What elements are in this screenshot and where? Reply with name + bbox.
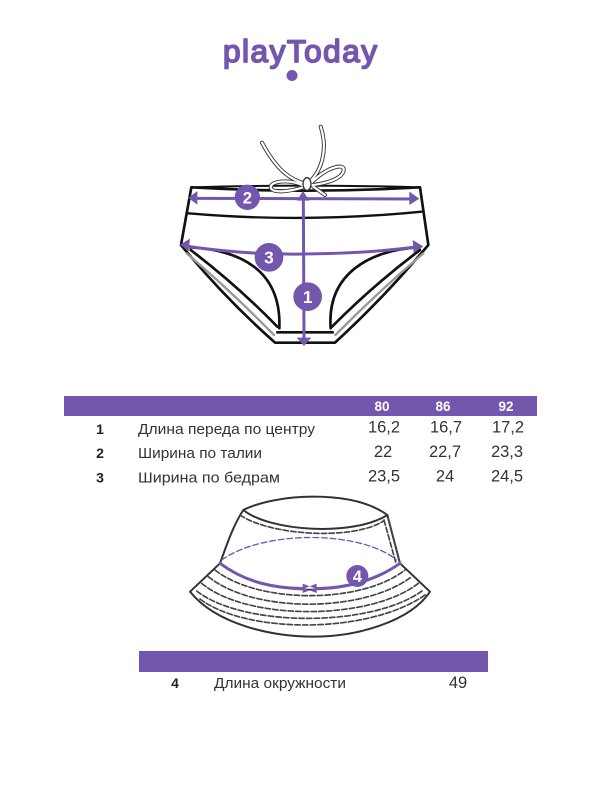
- arrow 1: front length: 1: [303, 287, 313, 307]
- arrow 3: hip width: [180, 239, 423, 272]
- arrow 3: hip width: 3: [264, 248, 274, 268]
- measurement arrows on briefs: [180, 185, 423, 346]
- row 1: [96, 418, 524, 438]
- header sizes: 80: [374, 399, 390, 414]
- row 3: [96, 468, 523, 486]
- briefs outline: [181, 187, 428, 343]
- hat stitching: [197, 515, 426, 625]
- arrow 2: waist width: [188, 185, 419, 210]
- row 3: Ширина по бедрам: [138, 470, 280, 486]
- arrow 4: circumference: [220, 563, 400, 593]
- arrow 1: front length: [293, 191, 322, 346]
- logo: playToday: playToday: [223, 33, 377, 69]
- row 4: Длина окружности: [214, 675, 346, 692]
- row 1: 1: [96, 421, 104, 437]
- row 1: Длина переда по центру: [138, 421, 316, 438]
- row 4: [171, 674, 467, 692]
- row 1: 17,2: [492, 418, 524, 436]
- hat outline: [190, 497, 430, 637]
- drawstring: [262, 127, 344, 195]
- header sizes: 86: [435, 399, 451, 414]
- row 3: 24,5: [491, 468, 523, 486]
- row 2: 22: [374, 443, 392, 461]
- arrow 4: circumference: 4: [353, 567, 363, 586]
- row 1: 16,7: [430, 418, 462, 436]
- garment: swim briefs with drawstring: [181, 186, 428, 343]
- dashed back circumference: [222, 537, 397, 560]
- row 4: 49: [449, 674, 467, 692]
- table header bar: [64, 396, 537, 416]
- header sizes: 92: [498, 399, 514, 414]
- row 2: 22,7: [429, 443, 461, 461]
- row 2: Ширина по талии: [138, 445, 262, 462]
- row 3: 24: [436, 468, 454, 486]
- header sizes: [374, 399, 514, 414]
- garment: bucket hat: [190, 497, 430, 637]
- row 1: 16,2: [368, 418, 400, 436]
- row 2: 23,3: [491, 443, 523, 461]
- row 4: 4: [171, 675, 179, 691]
- row 2: [96, 443, 523, 462]
- table header bar: [139, 651, 488, 672]
- row 2: 2: [96, 445, 104, 461]
- size table 2: [139, 651, 488, 692]
- arrow 2: waist width: 2: [243, 188, 252, 207]
- row 3: 3: [96, 470, 104, 486]
- size table 1: [64, 396, 537, 486]
- row 3: 23,5: [368, 468, 400, 486]
